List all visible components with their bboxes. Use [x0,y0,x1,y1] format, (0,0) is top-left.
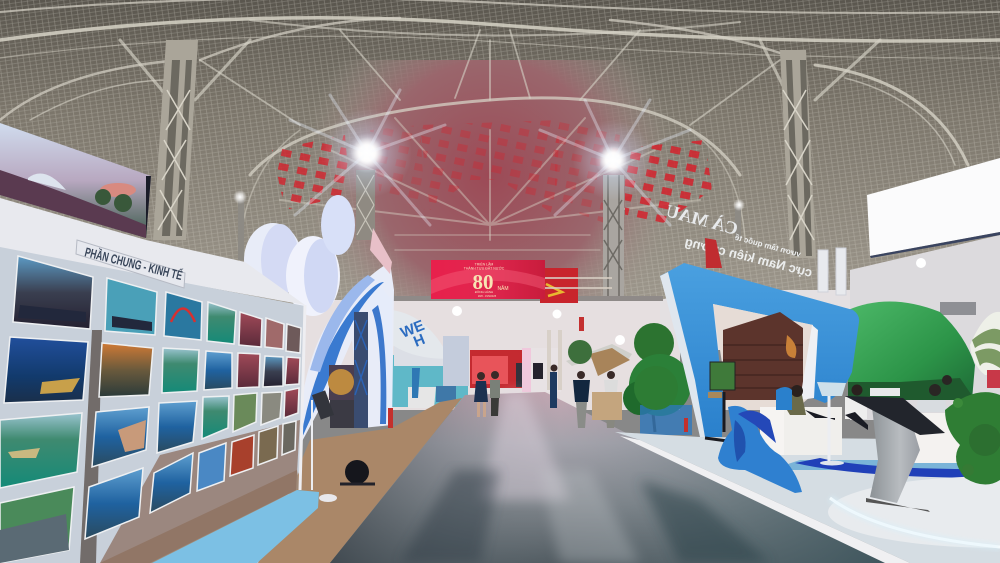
spot lamp on walkway [312,400,375,502]
photo row 4 [0,421,296,563]
central LED screen: 80 [472,270,494,294]
white curved booth: H [411,331,428,351]
right stage platform [615,432,1000,563]
central LED screen: 28/8 - 15/9/2025 [478,295,497,298]
hall back wall [300,235,1000,420]
foreground tree [945,392,1000,485]
signage letters: Ca Mau: cực Nam kiên cường [683,234,814,280]
visitors in the aisle [412,364,618,428]
green mound [848,301,975,400]
lamp masts [238,170,741,298]
right steel column [780,50,816,258]
central LED screen: NĂM [497,285,509,292]
sign: Phần chung - Kinh tế: PHẦN CHUNG - KINH TẾ [83,244,184,283]
tree centre [623,323,692,435]
right LED screen [867,158,1000,258]
central LED screen: TRIỂN LÃM [475,262,493,266]
signage letters: Ca Mau [664,200,846,295]
wooden kiosk [566,340,632,420]
touchscreen kiosk [845,396,945,512]
display wall base [152,490,319,563]
back red booth [470,317,584,392]
white curved booth [392,310,469,408]
signage letters: Ca Mau: vươn tầm quốc tế [733,233,802,259]
central LED screen [431,260,545,299]
signage letters: Ca Mau: CÀ MAU [664,200,740,239]
flags hanging under the roof [272,120,712,225]
central LED screen: ĐỒNG HÀNH [475,289,493,294]
lens glare [233,90,745,225]
red flag banner behind screen [540,268,612,303]
wave arch gateway [244,195,394,445]
wood walkway left [258,398,462,563]
palm [970,312,1000,388]
roof structure [0,0,1000,320]
polished floor [330,392,905,563]
photo row 1 [13,256,301,353]
sign: Phần chung - Kinh tế [76,240,185,288]
upper fascia of photo wall [0,198,305,305]
photo row 2 [4,337,300,403]
stand and monitor [684,362,846,466]
glass photo wall [0,247,305,563]
left LED screen [0,123,151,238]
photo row 3 [0,388,299,488]
lounge sofas and visitors [760,375,1000,463]
blue wave sculpture [718,406,802,493]
blue frame pavilion [660,263,859,437]
left steel column [153,40,198,240]
white curved booth: WE [398,317,427,342]
central LED screen: THÀNH TỰU ĐẤT NƯỚC [464,266,505,270]
